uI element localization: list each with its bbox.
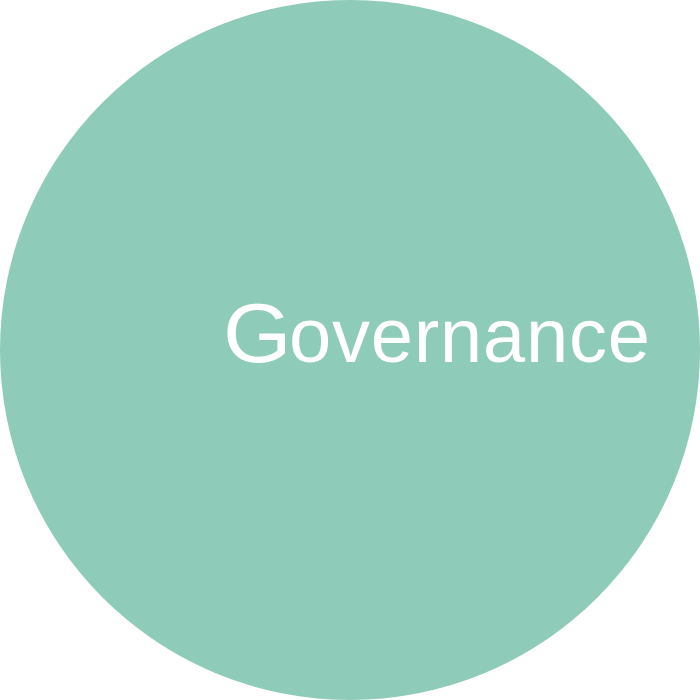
title: Governance: G	[223, 287, 292, 381]
title: Governance: overnance	[289, 294, 650, 379]
